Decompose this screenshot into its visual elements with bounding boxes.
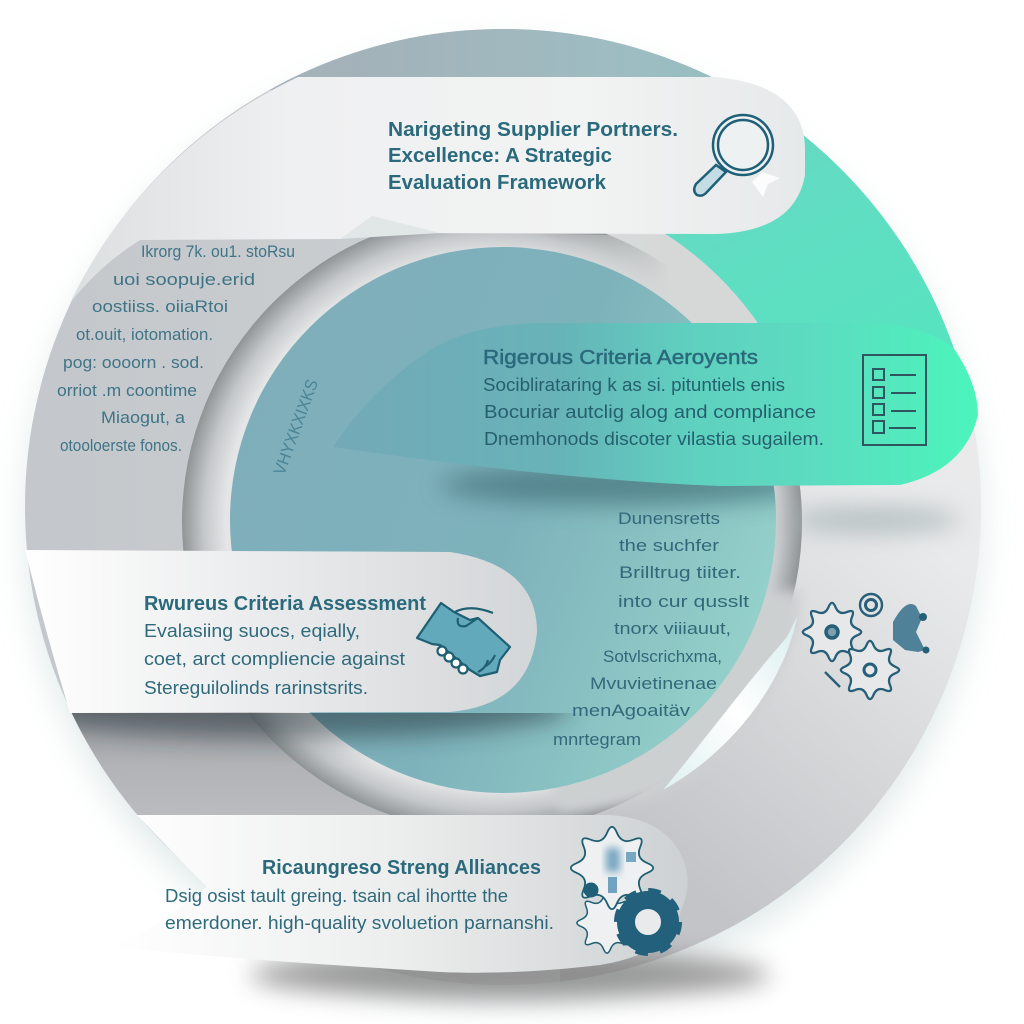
lower right ring wedge bbox=[500, 590, 802, 812]
panel: left text block: orriot .m coontime bbox=[57, 381, 197, 400]
alliances text: Ricaungreso Streng Alliances bbox=[262, 857, 541, 879]
panel: center right text: Sotvlscrichxma, bbox=[603, 647, 722, 666]
panel: center right text: into cur qusslt bbox=[618, 592, 749, 611]
panel: center right text: Brilltrug tiiter. bbox=[619, 563, 741, 582]
shadow beneath alliances panel bbox=[250, 951, 770, 999]
icon: magnifying glass bbox=[694, 115, 780, 197]
panel: center right text: Dunensretts bbox=[618, 509, 720, 528]
panel: left text block: otooloerste fonos. bbox=[60, 436, 182, 455]
lower right band bbox=[594, 636, 948, 968]
assessment text: coet, arct compliencie against bbox=[144, 649, 405, 669]
title text bbox=[388, 119, 678, 194]
criteria text: Rigerous Criteria Aeroyents bbox=[483, 347, 758, 369]
shadow under assessment pill bbox=[72, 713, 578, 754]
panel: left text block: uoi soopuje.erid bbox=[113, 270, 255, 289]
assessment text: Rwureus Criteria Assessment bbox=[144, 593, 426, 615]
panel: center right text: mnrtegram bbox=[553, 730, 641, 749]
icon: checklist bbox=[863, 355, 926, 445]
criteria text bbox=[483, 347, 824, 449]
criteria text: Dnemhonods discoter vilastia sugailem. bbox=[484, 429, 824, 449]
lower left band bbox=[72, 712, 390, 815]
panel: top title bbox=[70, 77, 805, 303]
shadow under green panel bbox=[440, 465, 820, 505]
scribbled rotated label: VHYXKXIXKS bbox=[270, 377, 322, 477]
title text: Evaluation Framework bbox=[388, 172, 607, 194]
panel: strong alliances bbox=[113, 815, 688, 973]
panel: criteria assessment pill bbox=[25, 550, 537, 713]
assessment text: Evalasiing suocs, eqially, bbox=[144, 621, 360, 641]
panel: left text block: ot.ouit, iotomation. bbox=[76, 325, 213, 344]
panel: center right text bbox=[553, 509, 749, 749]
panel: left text block bbox=[57, 242, 295, 455]
inner ring bbox=[182, 212, 802, 832]
top cap band bbox=[270, 29, 712, 90]
panel: center right text: the suchfer bbox=[619, 536, 719, 555]
panel: center right text: tnorx viiiauut, bbox=[614, 619, 731, 638]
white stripe on ring bbox=[663, 617, 797, 790]
criteria text: Bocuriar autclig alog and compliance bbox=[484, 402, 816, 422]
central teal circle bbox=[230, 247, 776, 793]
panel: left text block: Miaogut, a bbox=[101, 408, 186, 427]
panel: left text block: oostiiss. oiiaRtoi bbox=[92, 297, 228, 316]
teal crescent bbox=[665, 135, 954, 350]
alliances text: Dsig osist tault greing. tsain cal ihortte the bbox=[165, 886, 508, 906]
assessment text: Stereguilolinds rarinstsrits. bbox=[144, 678, 368, 698]
icon: handshake bbox=[417, 603, 510, 676]
alliances text bbox=[165, 857, 554, 933]
panel: green criteria bbox=[333, 323, 978, 486]
criteria text: Sociblirataring k as si. pituntiels enis bbox=[483, 375, 785, 395]
panel: center right text: Mvuvietinenae bbox=[590, 674, 717, 693]
assessment text bbox=[144, 593, 426, 698]
title text: Narigeting Supplier Portners. bbox=[388, 119, 678, 141]
panel: left text block: pog: oooorn . sod. bbox=[63, 353, 204, 372]
icon: gears and wrench bbox=[803, 594, 930, 699]
panel: left text block: Ikrorg 7k. ou1. stoRsu bbox=[141, 242, 295, 261]
icon: gears bbox=[571, 827, 678, 953]
panel: center right text: menAgoaitäv bbox=[572, 701, 691, 720]
pale fold corner bbox=[340, 216, 440, 239]
upper right ring band bbox=[560, 235, 790, 420]
alliances text: emerdoner. high-quality svoluetion parnanshi. bbox=[165, 913, 554, 933]
shadow on right band bbox=[790, 506, 960, 534]
title text: Excellence: A Strategic bbox=[388, 145, 612, 167]
